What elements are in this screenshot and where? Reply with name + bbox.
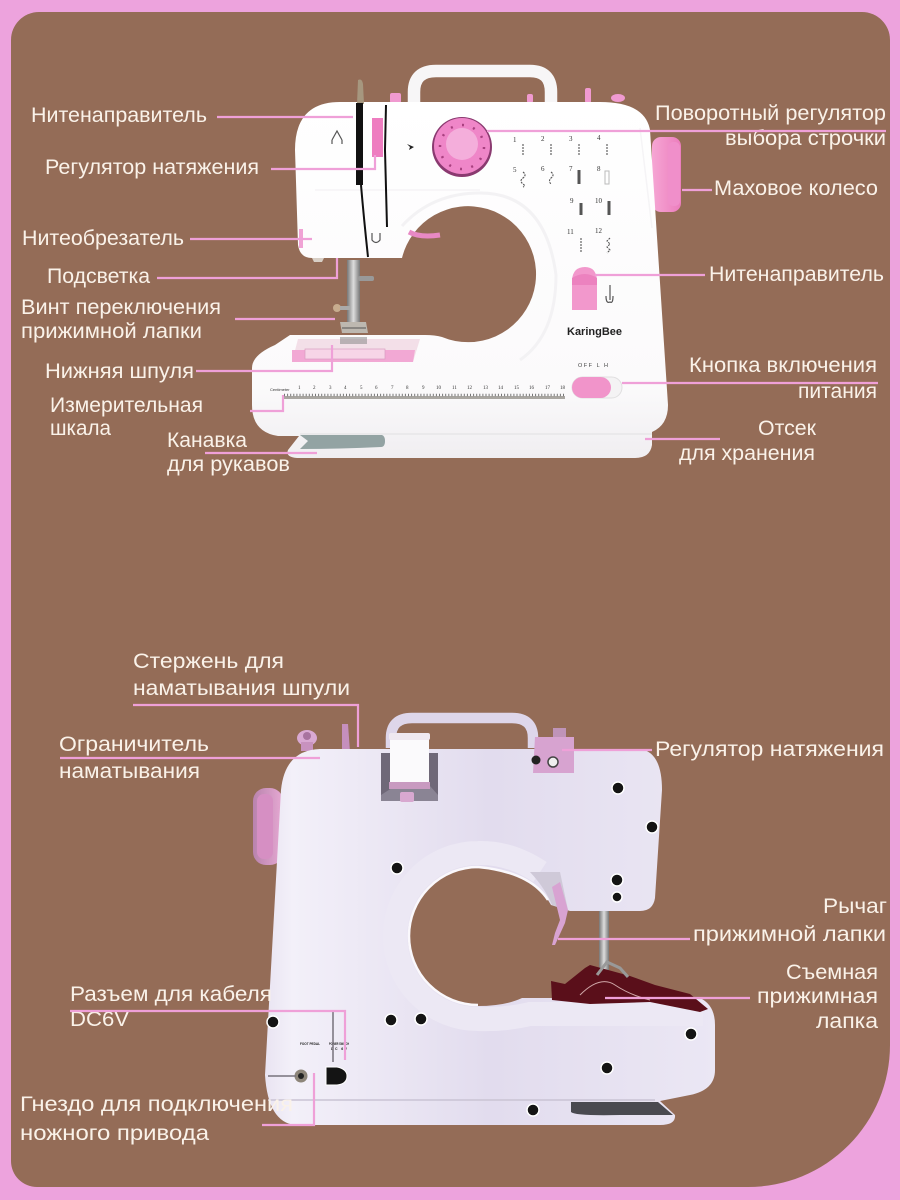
callout: presser foot lever: [558, 895, 887, 946]
callout: power button: [622, 354, 878, 403]
callout: winder stop: [59, 733, 320, 783]
callout: bobbin: [45, 345, 332, 383]
thread cutter: [299, 229, 303, 248]
callout: hand wheel: Маховое колесо: [714, 177, 878, 200]
stitch dial: [432, 117, 492, 177]
measuring scale: Centimeter: [270, 387, 290, 392]
stitch pattern chart: 11: [567, 228, 574, 236]
upper panel shading: [315, 128, 652, 228]
icon: top spindles: [390, 88, 625, 103]
callout: light: Подсветка: [47, 265, 150, 288]
socket indicator lines: [268, 1011, 333, 1076]
front-view sewing machine: [252, 71, 681, 458]
arrow mark: [407, 144, 414, 150]
callout: power cable socket: DC6V: [70, 1008, 129, 1031]
icon: hand wheel: [652, 137, 681, 212]
icon: hand wheel: [253, 788, 283, 865]
stitch pattern chart: 7: [569, 165, 573, 173]
measuring scale: 14: [498, 386, 504, 391]
needle bar and presser foot: [333, 260, 374, 333]
callout: tension regulator side: Регулятор натяжения: [655, 738, 884, 761]
stitch pattern chart: [513, 134, 610, 253]
measuring scale: 4: [344, 386, 347, 391]
stitch pattern chart: 9: [570, 197, 574, 205]
stitch pattern chart: 1: [513, 136, 517, 144]
hook mark: [372, 233, 380, 242]
brand logo: KaringBee: [567, 326, 622, 338]
bottom cutout: [571, 1102, 673, 1115]
foot pedal jack: [294, 1070, 308, 1082]
icon: handle: [414, 71, 551, 106]
spool well and thread spool: [381, 733, 438, 802]
callout: tension regulator: Регулятор натяжения: [45, 156, 259, 179]
callout: presser foot screw: Винт переключения: [21, 296, 221, 319]
measuring scale: 11: [452, 386, 457, 391]
machine body: [252, 102, 668, 458]
port labels: DC 6V: [331, 1047, 348, 1051]
power socket: [326, 1067, 347, 1085]
callout: presser foot screw: [21, 296, 335, 343]
callout: bobbin winder pin: наматывания шпули: [133, 677, 350, 700]
measuring scale: 8: [406, 386, 409, 391]
pink lever: [409, 232, 440, 236]
thread slot curve: [361, 185, 368, 257]
callout: measuring scale: [50, 394, 283, 440]
callout: bobbin winder pin: Стержень для: [133, 650, 284, 673]
callout: bobbin winder pin: [133, 650, 358, 747]
arch ring: [395, 853, 703, 1019]
measuring scale: 7: [391, 386, 394, 391]
light housing: [312, 258, 324, 262]
thread slot line: [385, 105, 387, 227]
callout: foot pedal jack: ножного привода: [20, 1122, 209, 1145]
callout: sleeve groove: Канавка: [167, 429, 247, 452]
measuring scale: 6: [375, 386, 378, 391]
stitch pattern chart: 3: [569, 135, 573, 143]
callout: bobbin: Нижняя шпуля: [45, 360, 194, 383]
callout: power cable socket: Разъем для кабеля: [70, 983, 272, 1006]
measuring scale: 5: [360, 386, 363, 391]
callout: winder stop: наматывания: [59, 760, 200, 783]
callout: presser foot lever: прижимной лапки: [693, 923, 886, 946]
icon: handle: [391, 718, 533, 748]
callout: detachable foot: [605, 961, 878, 1033]
black thread slot: [356, 103, 363, 185]
presser foot lever: [552, 882, 568, 945]
callout: storage: для хранения: [679, 442, 815, 465]
callout: presser foot screw: прижимной лапки: [21, 320, 202, 343]
callout: power button: Кнопка включения: [689, 354, 877, 377]
measuring scale: 1: [298, 386, 301, 391]
bobbin cover: [292, 337, 420, 362]
callout: foot pedal jack: [20, 1073, 314, 1145]
callout: sleeve groove: для рукавов: [167, 453, 290, 476]
callout: detachable foot: прижимная: [757, 985, 878, 1008]
machine body: [265, 749, 715, 1125]
power switch: [572, 363, 622, 398]
stitch pattern chart: 6: [541, 165, 545, 173]
callout: thread guide left: Нитенаправитель: [31, 104, 207, 127]
tension block: [532, 728, 574, 773]
port labels: [300, 1042, 349, 1051]
port labels: POWER SWITCH: [329, 1042, 349, 1046]
port labels: FOOT PEDAL: [300, 1042, 321, 1046]
measuring scale: 16: [529, 386, 534, 391]
callout: detachable foot: Съемная: [786, 961, 878, 984]
detachable foot with fabric: [551, 962, 708, 1012]
measuring scale: 2: [313, 386, 316, 391]
callout: thread cutter: Нитеобрезатель: [22, 227, 184, 250]
callout: storage: [645, 417, 817, 465]
measuring scale: 3: [329, 386, 332, 391]
inner arch ring: [402, 193, 556, 360]
bottom cover line: [268, 1099, 655, 1101]
callout: measuring scale: шкала: [50, 417, 111, 440]
thread guide slider: [572, 267, 613, 310]
power switch: OFF L H: [578, 363, 608, 369]
presser bar: [599, 911, 609, 981]
callout: thread guide right: Нитенаправитель: [709, 263, 884, 286]
stitch pattern chart: 10: [595, 197, 602, 205]
stitch pattern chart: 2: [541, 135, 545, 143]
callout: power cable socket: [70, 983, 345, 1060]
callout: sleeve groove: [167, 429, 317, 476]
measuring scale: 18: [560, 386, 566, 391]
screw holes: [267, 782, 697, 1116]
callout: presser foot lever: Рычаг: [823, 895, 887, 918]
lever notch: [530, 872, 568, 910]
side-view sewing machine: [253, 718, 715, 1125]
sleeve groove: [300, 435, 385, 449]
stitch pattern chart: 4: [597, 134, 601, 142]
callout: storage: Отсек: [758, 417, 817, 440]
measuring scale: 12: [467, 386, 472, 391]
measuring scale: 10: [436, 386, 442, 391]
callout: tension regulator: [45, 155, 375, 179]
measuring scale: 15: [514, 386, 520, 391]
stitch pattern chart: 8: [597, 165, 601, 173]
thread take-up post: [357, 80, 364, 104]
callout: winder stop: Ограничитель: [59, 733, 209, 756]
callout: stitch dial: [487, 102, 886, 150]
stitch pattern chart: 5: [513, 166, 517, 174]
stitch pattern chart: 12: [595, 227, 602, 235]
measuring scale: [270, 386, 566, 399]
storage drawer line: [300, 433, 652, 435]
callout: foot pedal jack: Гнездо для подключения: [20, 1093, 293, 1116]
callout: detachable foot: лапка: [816, 1010, 878, 1033]
measuring scale: 9: [422, 386, 425, 391]
callout: light: [47, 258, 337, 288]
bobbin winder stop and pin: [297, 724, 350, 752]
inner hole rim: [409, 867, 548, 1005]
measuring scale: 17: [545, 386, 550, 391]
callout: power button: питания: [798, 380, 877, 403]
callout: stitch dial: выбора строчки: [725, 127, 886, 150]
measuring scale: 13: [483, 386, 488, 391]
threading icon: [332, 131, 342, 144]
tension dial: [372, 118, 383, 157]
callout: stitch dial: Поворотный регулятор: [655, 102, 886, 125]
callout: measuring scale: Измерительная: [50, 394, 203, 417]
